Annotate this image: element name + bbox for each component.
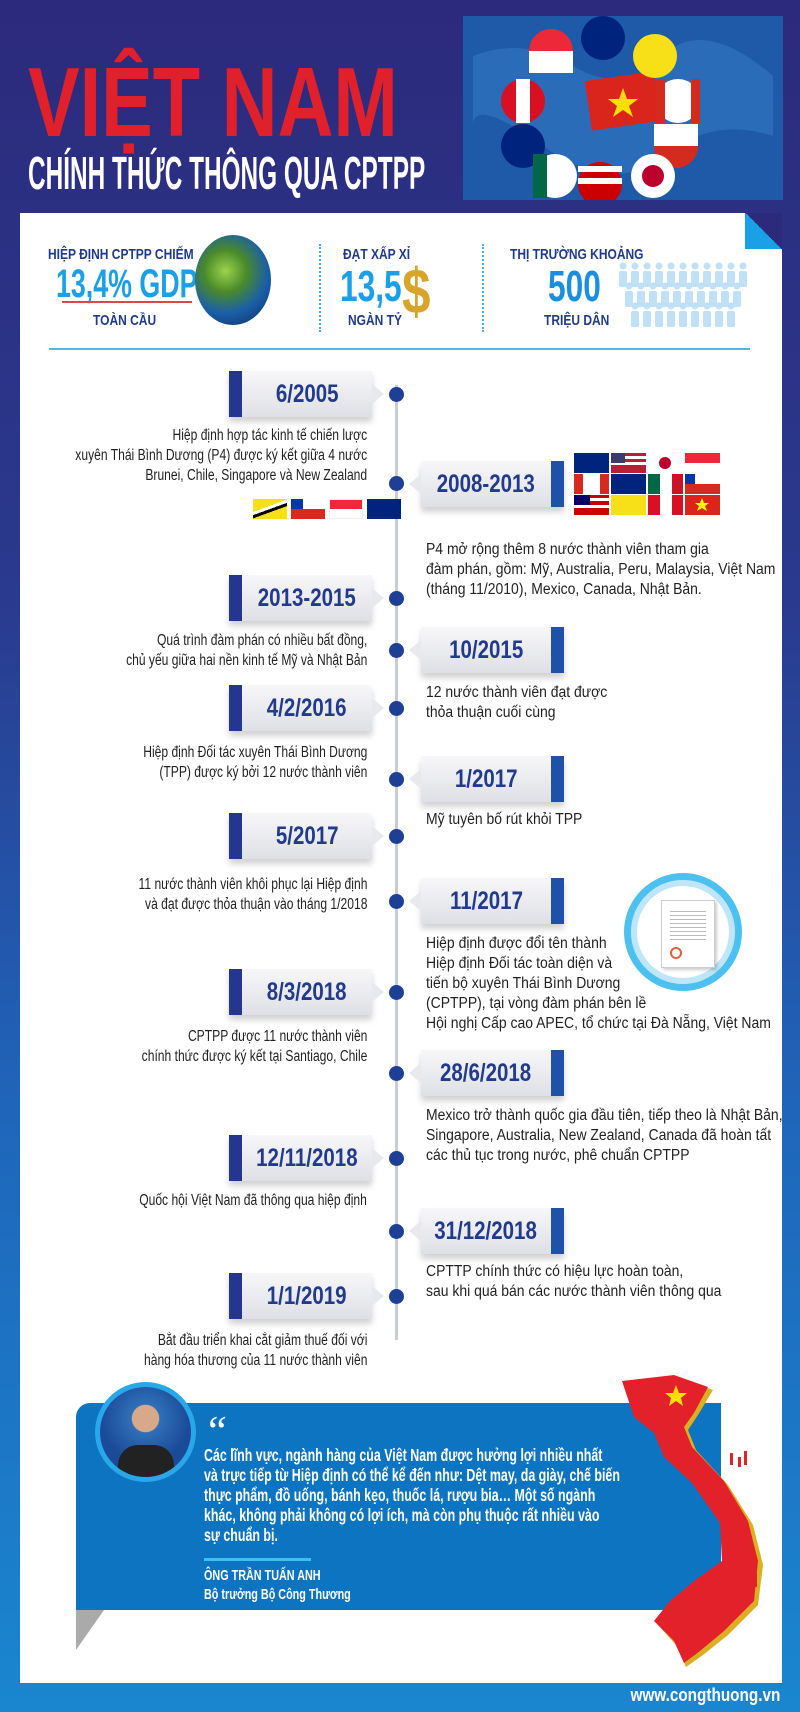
event: 4/2/2016: (TPP) được ký bởi 12 nước thành viên bbox=[159, 764, 367, 781]
event: 2013-2015: chủ yếu giữa hai nền kinh tế Mỹ và Nhật Bản bbox=[126, 652, 367, 669]
text: (tháng 11/2010), Mexico, Canada, Nhật Bản. bbox=[426, 581, 702, 598]
event: 8/3/2018: CPTPP được 11 nước thành viên bbox=[188, 1028, 367, 1045]
stat: GDP: TOÀN CẦU bbox=[93, 312, 156, 329]
event: 1/1/2019 bbox=[144, 1273, 404, 1369]
stat: 500 triệu dân: THỊ TRƯỜNG KHOẢNG bbox=[510, 246, 644, 263]
quote panel bbox=[76, 1403, 721, 1610]
event: 5/2017: 11 nước thành viên khôi phục lại Hiệp định bbox=[138, 876, 367, 893]
event: 4/2/2016: 4/2/2016 bbox=[267, 694, 347, 722]
event: 2008-2013 bbox=[389, 453, 775, 598]
quote text: sự chuẩn bị. bbox=[204, 1525, 278, 1545]
quote text: thực phẩm, đồ uống, bánh kẹo, thuốc lá, rượu bia… Một số ngành bbox=[204, 1485, 595, 1505]
event: 11/2017: 11/2017 bbox=[450, 887, 522, 915]
stat: 13,5 ngàn tỷ bbox=[340, 246, 430, 329]
footer url: www.congthuong.vn bbox=[630, 1685, 780, 1705]
event: 1/1/2019: 1/1/2019 bbox=[267, 1282, 347, 1310]
event: 5/2017: và đạt được thỏa thuận vào tháng 1/2018 bbox=[145, 896, 367, 913]
event: 8/3/2018: chính thức được ký kết tại Santiago, Chile bbox=[141, 1048, 367, 1065]
event: 12/11/2018: 12/11/2018 bbox=[256, 1144, 358, 1172]
quote text: và trực tiếp từ Hiệp định có thể kể đến như: Dệt may, da giày, chế biến bbox=[204, 1465, 620, 1485]
divider bbox=[319, 244, 321, 332]
stat: 13,5 ngàn tỷ: 13,5 bbox=[340, 262, 402, 311]
event: 2013-2015: Quá trình đàm phán có nhiều bất đồng, bbox=[157, 632, 367, 649]
event: 28/6/2018: Mexico trở thành quốc gia đầu tiên, tiếp theo là Nhật Bản, bbox=[426, 1107, 783, 1124]
event: 11/2017: Hội nghị Cấp cao APEC, tổ chức tại Đà Nẵng, Việt Nam bbox=[426, 1015, 771, 1032]
event: 10/2015: 10/2015 bbox=[449, 636, 523, 664]
event: 1/1/2019: Bắt đầu triển khai cắt giảm thuế đối với bbox=[157, 1332, 367, 1349]
event: 12/11/2018 bbox=[139, 1135, 404, 1209]
event: 31/12/2018 bbox=[389, 1208, 722, 1300]
event: 10/2015 bbox=[389, 627, 607, 721]
heading: VIỆT NAM: VIỆT NAM bbox=[28, 47, 398, 157]
divider bbox=[482, 244, 484, 332]
event: 2013-2015: 2013-2015 bbox=[258, 584, 356, 612]
icon: people bbox=[619, 262, 747, 327]
stat: 13,5 ngàn tỷ: NGÀN TỶ bbox=[348, 312, 402, 329]
event: 31/12/2018: sau khi quá bán các nước thành viên thông qua bbox=[426, 1283, 721, 1300]
speaker: Bộ trưởng Bộ Công Thương bbox=[204, 1586, 351, 1603]
icon: dollar: $ bbox=[402, 255, 430, 327]
event: 1/2017 bbox=[389, 756, 582, 828]
event: 6/2005: Hiệp định hợp tác kinh tế chiến lược bbox=[172, 427, 367, 444]
event: 28/6/2018: Singapore, Australia, New Zealand, Canada đã hoàn tất bbox=[426, 1127, 771, 1144]
quote text bbox=[204, 1445, 620, 1545]
event: 31/12/2018: 31/12/2018 bbox=[435, 1217, 537, 1245]
stat: GDP: HIỆP ĐỊNH CPTPP CHIẾM bbox=[48, 246, 194, 263]
event: 8/3/2018 bbox=[141, 969, 404, 1065]
event: 12/11/2018: Quốc hội Việt Nam đã thông qua hiệp định bbox=[139, 1192, 367, 1209]
stat: 500 triệu dân: 500 bbox=[548, 262, 601, 311]
quote text: khác, không phải không có lợi ích, mà còn phụ thuộc rất nhiều vào bbox=[204, 1505, 599, 1525]
portrait photo bbox=[95, 1382, 196, 1482]
event: 4/2/2016 bbox=[143, 685, 404, 781]
corner fold bbox=[745, 213, 782, 249]
icon: globe bbox=[195, 235, 271, 325]
event: 2008-2013: đàm phán, gồm: Mỹ, Australia, Peru, Malaysia, Việt Nam bbox=[426, 561, 775, 578]
event: 11/2017: Hiệp định Đối tác toàn diện và bbox=[426, 955, 612, 972]
stat: 500 triệu dân: TRIỆU DÂN bbox=[544, 312, 609, 329]
subheading: CHÍNH THỨC THÔNG QUA CPTPP bbox=[28, 147, 425, 199]
title bbox=[28, 47, 425, 199]
event: 11/2017: tiến bộ xuyên Thái Bình Dương bbox=[426, 975, 620, 992]
stat: 500 triệu dân bbox=[510, 246, 747, 329]
event: 6/2005: xuyên Thái Bình Dương (P4) được ký kết giữa 4 nước bbox=[75, 447, 367, 464]
flags: P4 bbox=[253, 499, 287, 519]
map with flags bbox=[463, 16, 783, 200]
event: 5/2017 bbox=[138, 813, 404, 913]
event: 11/2017: (CPTPP), tại vòng đàm phán bên lề bbox=[426, 995, 646, 1012]
stat: GDP bbox=[48, 235, 271, 329]
vietnam map bbox=[622, 1375, 763, 1667]
stat: 13,5 ngàn tỷ: ĐẠT XẤP XỈ bbox=[343, 246, 410, 263]
event: 6/2005 bbox=[75, 371, 404, 519]
event: 10/2015: 12 nước thành viên đạt được bbox=[426, 684, 607, 701]
speaker: ÔNG TRẦN TUẤN ANH bbox=[204, 1567, 321, 1584]
event: 2013-2015 bbox=[126, 575, 404, 669]
quote text: Các lĩnh vực, ngành hàng của Việt Nam được hưởng lợi nhiều nhất bbox=[204, 1445, 602, 1465]
event: 2008-2013: 2008-2013 bbox=[437, 470, 535, 498]
event: 1/2017: 1/2017 bbox=[455, 765, 517, 793]
event: 11/2017: Hiệp định được đổi tên thành bbox=[426, 935, 607, 952]
event: 8/3/2018: 8/3/2018 bbox=[267, 978, 347, 1006]
event: 2008-2013: P4 mở rộng thêm 8 nước thành viên tham gia bbox=[426, 541, 709, 558]
event: 31/12/2018: CPTTP chính thức có hiệu lực hoàn toàn, bbox=[426, 1263, 683, 1280]
event: 28/6/2018 bbox=[389, 1050, 783, 1164]
timeline line bbox=[395, 385, 398, 1340]
event: 6/2005: Brunei, Chile, Singapore và New Zealand bbox=[145, 467, 367, 484]
event: 1/1/2019: hàng hóa thương của 11 nước thành viên bbox=[144, 1352, 367, 1369]
icon: CPTPP document circle bbox=[624, 873, 742, 991]
event: 11/2017 bbox=[389, 878, 771, 1032]
event: 5/2017: 5/2017 bbox=[276, 822, 338, 850]
event: 28/6/2018: 28/6/2018 bbox=[440, 1059, 532, 1087]
flags grid bbox=[574, 453, 720, 515]
event: 10/2015: thỏa thuận cuối cùng bbox=[426, 704, 556, 721]
stat: GDP: 13,4% GDP bbox=[56, 262, 198, 306]
event: 6/2005: 6/2005 bbox=[276, 380, 338, 408]
event: 1/2017: Mỹ tuyên bố rút khỏi TPP bbox=[426, 811, 582, 828]
fold bbox=[76, 1610, 104, 1650]
event: 28/6/2018: các thủ tục trong nước, phê chuẩn CPTPP bbox=[426, 1147, 690, 1164]
quote mark: “ bbox=[204, 1409, 227, 1455]
speaker bbox=[204, 1566, 351, 1603]
event: 4/2/2016: Hiệp định Đối tác xuyên Thái Bình Dương bbox=[143, 744, 367, 761]
